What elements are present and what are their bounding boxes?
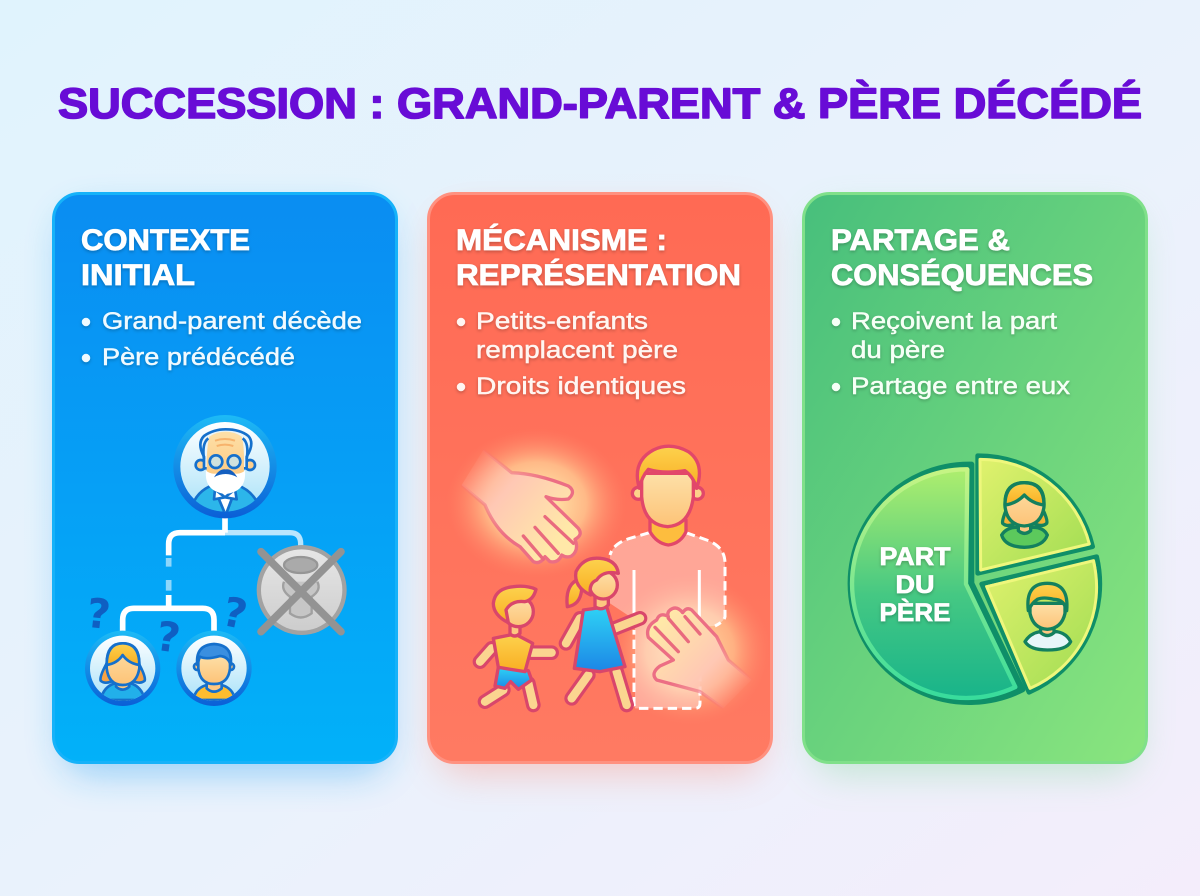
icons: question marks: ? — [84, 589, 113, 639]
heading: contexte initial — [81, 224, 250, 292]
slice: part du père — [850, 464, 1023, 702]
icon: granddaughter — [1002, 483, 1047, 547]
family tree diagram — [84, 415, 347, 706]
heading: contexte initial: CONTEXTE — [81, 224, 250, 257]
bullet list: contexte: Grand-parent décède — [102, 308, 362, 335]
heading: partage: CONSÉQUENCES — [831, 258, 1093, 292]
bullet list: partage: Reçoivent la part — [851, 308, 1057, 335]
bullet list: mécanisme: remplacent père — [476, 337, 678, 364]
connector lines — [123, 517, 301, 633]
icons: question marks: ? — [218, 587, 252, 639]
heading: mécanisme: REPRÉSENTATION — [456, 258, 741, 292]
bullet list: partage: du père — [851, 337, 945, 364]
slice: lower share — [982, 557, 1100, 692]
panel: contexte initial — [54, 194, 396, 774]
slice: upper share — [978, 456, 1093, 573]
chart label: part du père: DU — [896, 571, 934, 599]
panel: partage et conséquences — [804, 194, 1146, 774]
avatar: deceased father crossed out — [257, 545, 347, 635]
avatar: grandson — [176, 631, 252, 706]
avatar: granddaughter — [85, 631, 160, 706]
panel: mécanisme représentation — [428, 194, 772, 774]
icons: question marks — [84, 587, 252, 663]
bullet list: mécanisme: Petits-enfants — [476, 308, 648, 335]
bullet list: mécanisme: Droits identiques — [476, 373, 686, 400]
bullet list: partage: Partage entre eux — [851, 373, 1070, 400]
father with dashed outline — [610, 446, 725, 708]
child: boy running — [480, 586, 552, 705]
bullet list: contexte — [82, 308, 362, 371]
icons: question marks: ? — [153, 612, 183, 663]
chart label: part du père: PÈRE — [880, 598, 950, 627]
bullet list: partage — [832, 308, 1070, 400]
icon: grandson — [1025, 583, 1071, 650]
chart label: part du père: PART — [880, 543, 950, 571]
heading: contexte initial: INITIAL — [81, 259, 195, 292]
bullet list: mécanisme — [457, 308, 686, 400]
heading: mécanisme: MÉCANISME : — [456, 223, 667, 257]
hand: upper left — [462, 450, 580, 563]
avatar: grandparent — [173, 415, 277, 518]
pie chart: part du père — [850, 456, 1100, 702]
title: SUCCESSION : GRAND-PARENT & PÈRE DÉCÉDÉ — [58, 80, 1142, 128]
chart label: part du père — [880, 543, 950, 627]
heading: mécanisme — [456, 223, 741, 292]
bullet list: contexte: Père prédécédé — [102, 344, 295, 371]
heading: partage: PARTAGE & — [831, 224, 1010, 257]
heading: partage — [831, 224, 1093, 292]
glow behind hands — [447, 428, 627, 578]
illustration: hands and children replacing father — [447, 428, 770, 725]
hand: lower right — [648, 608, 752, 708]
child: girl running — [566, 558, 640, 705]
